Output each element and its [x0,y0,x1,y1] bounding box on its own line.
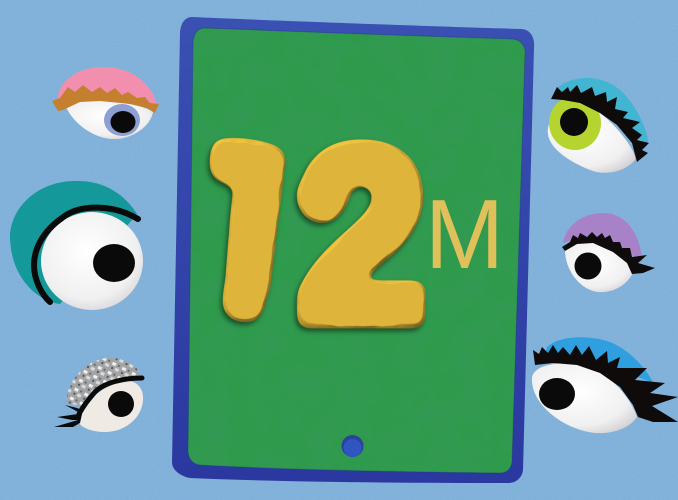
eyeball [65,101,153,139]
tablet green screen [188,28,525,473]
digit 2 hook bulge [297,169,347,223]
home button [342,435,364,457]
lashes [52,85,159,113]
pupil [108,391,134,417]
eye: lime iris [548,78,649,173]
pupil [539,378,575,410]
lash line [34,208,138,302]
pupil [110,111,136,133]
digit 1 [205,138,286,328]
lid [67,358,141,406]
eyeball [41,212,143,310]
tablet [172,17,534,483]
lashes [533,345,678,422]
lashes [551,85,649,162]
lid [563,213,642,262]
iris [104,104,140,136]
pupil [93,244,135,282]
pupil [574,252,602,280]
big number 12 in clay [205,138,426,334]
unit letter M: M [425,179,504,289]
pupil [560,108,588,136]
lid [58,67,157,104]
eyeball [78,381,143,432]
eyeball [548,107,635,173]
eye: bright blue lid [532,337,678,433]
iris [549,96,601,150]
digit 1: 1 [170,98,326,370]
lashes [562,232,655,274]
lid [545,337,653,383]
eye: teal lid [10,181,143,310]
tablet blue frame [172,17,534,483]
digit 2: 2 [299,100,425,370]
lid [555,78,648,143]
eye: purple lid [562,213,655,292]
eyeball [565,242,633,292]
eye: silver glitter lid [54,358,143,432]
eye: pink lid [52,67,159,139]
lash line [79,378,142,414]
lash tips [54,405,82,427]
eyeball [532,363,637,433]
lid [10,181,137,304]
